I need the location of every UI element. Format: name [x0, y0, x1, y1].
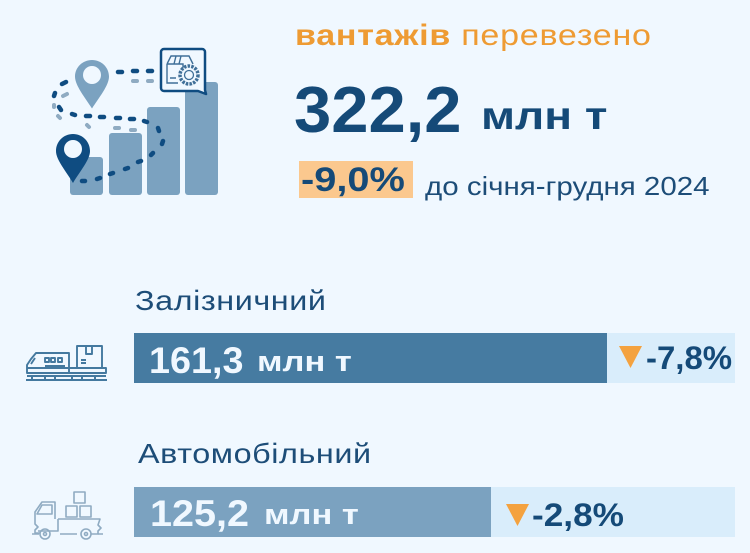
rail value fill — [134, 333, 607, 383]
heading: cargo transported: вантажів перевезено — [295, 19, 652, 52]
change badge value: -9,0% — [301, 161, 405, 199]
road bar — [134, 487, 735, 537]
change badge — [299, 161, 413, 198]
speech bubble with box and gear — [161, 49, 206, 94]
rail bar — [134, 333, 735, 383]
icon: freight train — [26, 345, 107, 381]
route dashes dark — [54, 71, 163, 181]
road change value: -2,8% — [532, 497, 624, 533]
road value unit: млн т — [264, 499, 359, 531]
road value fill — [134, 487, 491, 537]
icon: cargo truck — [32, 491, 103, 540]
rail change arrow — [619, 346, 642, 368]
total value — [294, 73, 607, 146]
road heading: Автомобільний — [138, 438, 372, 469]
icon: logistics chart with route and pins — [52, 48, 218, 195]
rail value unit: млн т — [257, 346, 352, 378]
light pin — [75, 60, 109, 108]
road value number: 125,2 — [150, 493, 249, 534]
total number: 322,2 — [294, 73, 462, 146]
icon bars — [70, 82, 218, 195]
comparison period: до січня-грудня 2024 — [425, 171, 710, 201]
dark pin — [56, 134, 90, 183]
rail heading: Залізничний — [135, 285, 327, 316]
route dashes light — [54, 81, 152, 130]
total unit: млн т — [481, 95, 607, 138]
rail change value: -7,8% — [646, 340, 732, 376]
road change arrow — [506, 504, 529, 526]
rail value number: 161,3 — [149, 340, 243, 381]
